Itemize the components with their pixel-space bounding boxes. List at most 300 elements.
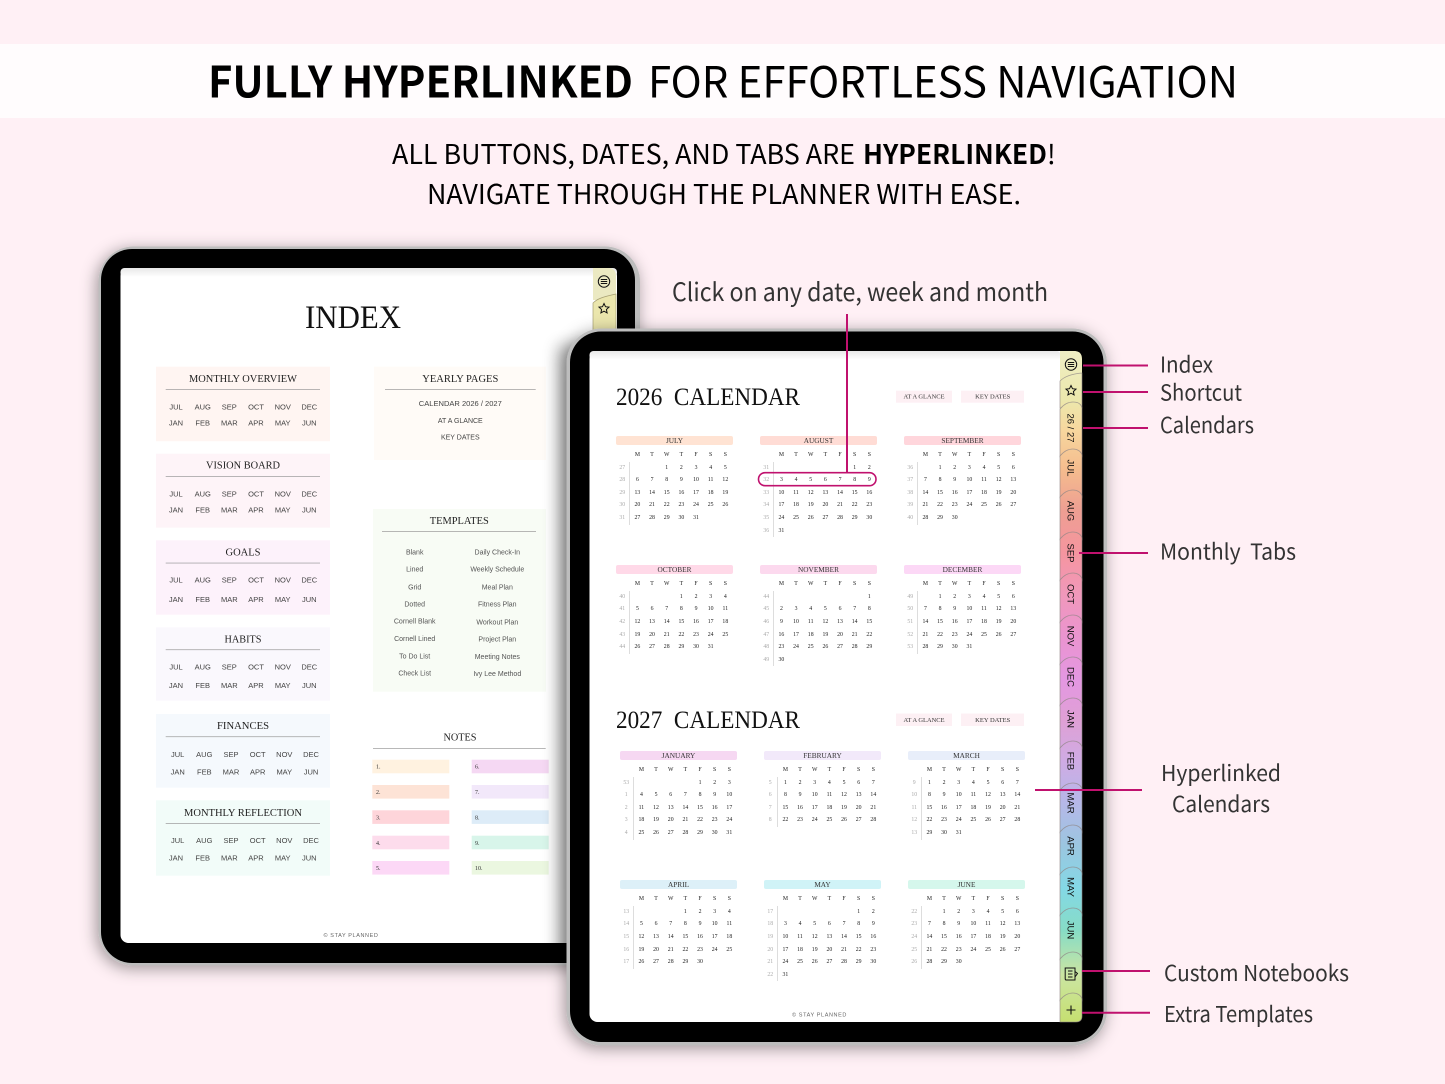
month: July 2026: 31 <box>693 515 699 521</box>
month: September 2026: 12 <box>996 477 1002 483</box>
panel: monthly overview: MAR <box>221 419 238 428</box>
month: April 2027: 26 <box>638 959 644 965</box>
callout: calendars: Calendars <box>1160 408 1254 440</box>
month: February 2027: 16 <box>797 805 803 811</box>
panel: goals: MAR <box>221 595 238 604</box>
month: June 2027: 22 <box>911 909 917 915</box>
month: November 2026: 21 <box>852 632 858 638</box>
month: May 2027: 22 <box>767 972 773 978</box>
tab labels: MAY <box>1064 877 1076 898</box>
month: September 2026: 37 <box>907 477 913 483</box>
month: January 2027: 12 <box>653 805 659 811</box>
month: June 2027: 23 <box>911 921 917 927</box>
month: September 2026: 18 <box>981 490 987 496</box>
month: December 2026: 49 <box>907 594 913 600</box>
month: January 2027: 15 <box>697 805 703 811</box>
month: March 2027: 12 <box>911 817 917 823</box>
panel: vision board: JUN <box>302 506 317 515</box>
month: August 2026: 9 <box>868 477 871 483</box>
month: November 2026: 7 <box>853 606 856 612</box>
month: October 2026: 6 <box>651 606 654 612</box>
panel: vision board: SEP <box>222 489 237 498</box>
month: May 2027: 25 <box>797 959 803 965</box>
month: December 2026: 31 <box>966 644 972 650</box>
month: March 2027: 6 <box>1001 780 1004 786</box>
panel: monthly overview: FEB <box>195 419 210 428</box>
panel: templates: Lined <box>406 567 423 574</box>
month: August 2026: 21 <box>837 502 843 508</box>
month: June 2027: 16 <box>956 934 962 940</box>
month: June 2027: 8 <box>943 921 946 927</box>
month: December 2026: 9 <box>953 606 956 612</box>
month: April 2027 <box>620 880 737 969</box>
month: September 2026: 19 <box>996 490 1002 496</box>
month: September 2026: 2 <box>953 465 956 471</box>
panel: goals: AUG <box>195 576 211 585</box>
month: December 2026: 27 <box>1010 632 1016 638</box>
month: May 2027: 20 <box>767 947 773 953</box>
month: April 2027: T <box>684 896 687 902</box>
month: April 2027: 8 <box>684 921 687 927</box>
month: April 2027: 5 <box>640 921 643 927</box>
month: December 2026: M <box>923 581 928 587</box>
month: March 2027: 11 <box>971 792 976 798</box>
month: January 2027: W <box>668 767 673 773</box>
panel: notes: 4. <box>376 841 381 847</box>
month: February 2027: 28 <box>870 817 876 823</box>
panel: monthly reflection: NOV <box>276 836 292 845</box>
month: April 2027: 10 <box>712 921 718 927</box>
month: July 2026: W <box>664 452 669 458</box>
month: August 2026: 26 <box>808 515 814 521</box>
month: April 2027: 22 <box>682 947 688 953</box>
month: July 2026: 15 <box>664 490 670 496</box>
panel: monthly reflection: APR <box>248 854 264 863</box>
month: June 2027: 21 <box>926 947 932 953</box>
month: September 2026: 25 <box>981 502 987 508</box>
panel: goals: OCT <box>248 576 264 585</box>
panel: monthly overview: JUN <box>302 419 317 428</box>
callout: hyperlinked calendars <box>1035 756 1281 819</box>
month: August 2026: S <box>868 452 871 458</box>
panel: monthly overview: JUL <box>169 403 183 412</box>
month: December 2026: 16 <box>952 619 958 625</box>
month: January 2027: JANUARY <box>662 751 695 760</box>
panel: monthly reflection: JUL <box>171 836 184 845</box>
panel: finances: MAY <box>276 768 292 777</box>
month: January 2027: 29 <box>697 830 703 836</box>
month: February 2027: T <box>828 767 831 773</box>
month: May 2027: 24 <box>782 959 788 965</box>
month: January 2027: 6 <box>669 792 672 798</box>
month: October 2026: 29 <box>678 644 684 650</box>
month: September 2026: M <box>923 452 928 458</box>
month: July 2026: 7 <box>651 477 654 483</box>
panel: finances: NOV <box>276 750 292 759</box>
month: January 2027: 5 <box>655 792 658 798</box>
month: April 2027: 13 <box>623 909 629 915</box>
month: December 2026: 8 <box>939 606 942 612</box>
month: March 2027: S <box>1016 767 1019 773</box>
panel: habits: FEB <box>195 681 210 690</box>
month: October 2026: T <box>680 581 683 587</box>
month: December 2026: 53 <box>907 644 913 650</box>
panel: monthly reflection: MAY <box>275 854 291 863</box>
month: October 2026: 31 <box>708 644 714 650</box>
panel: templates: Project Plan <box>478 636 516 643</box>
month: June 2027: 23 <box>956 947 962 953</box>
tab labels <box>1064 413 1076 939</box>
panel: vision board: APR <box>248 506 264 515</box>
month: February 2027: 5 <box>843 780 845 786</box>
panel: monthly overview: OCT <box>248 403 264 412</box>
month: August 2026: 13 <box>822 490 828 496</box>
month: October 2026 <box>616 565 733 654</box>
month: November 2026: 45 <box>763 606 769 612</box>
panel: templates: To Do List <box>399 653 430 660</box>
month: May 2027: 18 <box>767 921 773 927</box>
month: August 2026: 1 <box>853 465 856 471</box>
panel: finances: DEC <box>303 750 319 759</box>
month: July 2026: T <box>650 452 654 458</box>
month: October 2026: 13 <box>649 619 655 625</box>
panel: yearly pages: CALENDAR 2026 / 2027 <box>419 401 502 408</box>
month: March 2027: T <box>972 767 975 773</box>
month: December 2026: F <box>982 581 986 587</box>
month: October 2026: 14 <box>664 619 670 625</box>
month: December 2026: 4 <box>983 594 985 600</box>
month: May 2027: 16 <box>870 934 876 940</box>
month: February 2027: 27 <box>856 817 862 823</box>
month: July 2026: 9 <box>680 477 683 483</box>
month: August 2026: T <box>824 452 827 458</box>
month: April 2027: 15 <box>682 934 688 940</box>
month: November 2026: 46 <box>763 619 769 625</box>
panel: yearly pages: KEY DATES <box>441 434 480 442</box>
panel: goals: JUL <box>169 576 183 585</box>
month: December 2026: T <box>938 581 942 587</box>
month: March 2027: 23 <box>941 817 947 823</box>
month: January 2027: 26 <box>653 830 659 836</box>
month: April 2027: 28 <box>668 959 674 965</box>
month: April 2027: 12 <box>638 934 644 940</box>
month: May 2027: 5 <box>813 921 816 927</box>
month: April 2027: 23 <box>697 947 703 953</box>
shadow of front tablet on index screen <box>548 336 579 943</box>
month: March 2027: 11 <box>911 805 917 811</box>
panel: templates: Meeting Notes <box>475 654 520 661</box>
month: September 2026: 11 <box>981 477 987 483</box>
month: November 2026: 5 <box>824 606 827 612</box>
month: October 2026: 19 <box>634 632 640 638</box>
month: September 2026: 14 <box>922 490 928 496</box>
month: December 2026: 13 <box>1010 606 1016 612</box>
month: December 2026: 51 <box>907 619 913 625</box>
month: May 2027: 1 <box>857 909 860 915</box>
month: April 2027: 29 <box>682 959 688 965</box>
heading: 2026 calendar: 2026 CALENDAR <box>616 384 800 411</box>
month: November 2026: 4 <box>809 606 812 612</box>
month: March 2027: 12 <box>985 792 991 798</box>
month: November 2026: 12 <box>822 619 828 625</box>
panel: monthly overview: DEC <box>301 403 318 412</box>
panel: yearly pages: AT A GLANCE <box>438 418 483 425</box>
month: March 2027: 20 <box>1000 805 1006 811</box>
panel: monthly reflection: JAN <box>169 854 183 863</box>
month: March 2027: 13 <box>1000 792 1006 798</box>
month: May 2027: 21 <box>767 959 773 965</box>
month: May 2027: T <box>828 896 831 902</box>
month: December 2026: 17 <box>966 619 972 625</box>
month: August 2026: 33 <box>763 490 769 496</box>
month: August 2026: 25 <box>793 515 799 521</box>
panel: templates: Meal Plan <box>482 584 513 591</box>
month: January 2027: 19 <box>653 817 659 823</box>
button: at a glance 2026 <box>896 391 952 403</box>
index heading: INDEX <box>305 300 401 336</box>
month: March 2027: 14 <box>1014 792 1020 798</box>
month: June 2027: 30 <box>956 959 962 965</box>
month: January 2027: 13 <box>668 805 674 811</box>
month: May 2027: M <box>783 896 788 902</box>
month: January 2027 <box>620 751 737 840</box>
month: September 2026: 38 <box>907 490 913 496</box>
button: at a glance 2027: AT A GLANCE <box>904 718 945 724</box>
callout: monthly tabs: Monthly Tabs <box>1160 534 1296 566</box>
month: July 2026: 29 <box>619 490 625 496</box>
month: April 2027: 20 <box>653 947 659 953</box>
month: August 2026: S <box>853 452 856 458</box>
month: August 2026: 22 <box>852 502 858 508</box>
month: January 2027: 23 <box>712 817 718 823</box>
month: May 2027: 8 <box>857 921 860 927</box>
month: April 2027: 7 <box>669 921 672 927</box>
tab labels: OCT <box>1064 584 1076 604</box>
month: August 2026: 12 <box>808 490 814 496</box>
month: October 2026: 20 <box>649 632 655 638</box>
panel: vision board: FEB <box>195 506 210 515</box>
month: February 2027: T <box>798 767 802 773</box>
panel: monthly reflection <box>156 800 330 876</box>
month: February 2027: 13 <box>856 792 862 798</box>
month: January 2027: F <box>698 767 702 773</box>
panel: vision board: MAY <box>275 506 291 515</box>
month: December 2026 <box>904 565 1021 654</box>
month: November 2026: 17 <box>793 632 799 638</box>
month: November 2026: 28 <box>852 644 858 650</box>
panel: monthly reflection: SEP <box>223 836 239 845</box>
month: July 2026: S <box>724 452 727 458</box>
month: December 2026: W <box>952 581 957 587</box>
panel: vision board: JUL <box>169 489 183 498</box>
month: September 2026: 8 <box>939 477 942 483</box>
month: May 2027: 11 <box>797 934 803 940</box>
panel: templates: Weekly Schedule <box>470 567 524 574</box>
month: November 2026: 44 <box>763 594 769 600</box>
month: October 2026: 12 <box>634 619 640 625</box>
month: June 2027: 4 <box>987 909 989 915</box>
month: January 2027: 20 <box>668 817 674 823</box>
tab labels: SEP <box>1064 543 1076 563</box>
panel: monthly reflection: MAR <box>221 854 238 863</box>
panel: monthly overview: JAN <box>169 419 183 428</box>
month: July 2026: 27 <box>634 515 640 521</box>
month: January 2027: 11 <box>639 805 644 811</box>
panel: habits: HABITS <box>224 634 262 645</box>
month: September 2026: 10 <box>966 477 972 483</box>
month: December 2026: 29 <box>937 644 943 650</box>
panel: habits: JAN <box>169 681 183 690</box>
month: December 2026: 2 <box>953 594 956 600</box>
month: July 2026: 21 <box>649 502 655 508</box>
month: August 2026: 2 <box>868 465 871 471</box>
month: November 2026: 16 <box>778 632 784 638</box>
month: December 2026: 20 <box>1010 619 1016 625</box>
month: September 2026: S <box>1012 452 1015 458</box>
panel: habits: JUL <box>169 662 183 671</box>
month: November 2026: S <box>853 581 856 587</box>
month: September 2026: 23 <box>952 502 958 508</box>
month: June 2027: 24 <box>970 947 976 953</box>
month: August 2026: 23 <box>866 502 872 508</box>
month: April 2027: S <box>713 896 716 902</box>
month: January 2027: 25 <box>638 830 644 836</box>
month: September 2026: 22 <box>937 502 943 508</box>
panel: vision board: VISION BOARD <box>206 461 280 472</box>
header band <box>0 44 1445 118</box>
month: November 2026: 23 <box>778 644 784 650</box>
panel: goals: SEP <box>222 576 237 585</box>
panel: templates: Workout Plan <box>476 619 518 626</box>
tab labels: NOV <box>1064 626 1076 647</box>
month: December 2026: 5 <box>997 594 1000 600</box>
month: April 2027: W <box>668 896 673 902</box>
month: February 2027: F <box>842 767 846 773</box>
month: April 2027: 19 <box>638 947 644 953</box>
month: September 2026: 13 <box>1010 477 1016 483</box>
panel: finances: JAN <box>171 768 185 777</box>
front tablet: calendar page <box>566 328 1107 1046</box>
month: February 2027: 11 <box>827 792 832 798</box>
month: February 2027: 14 <box>870 792 876 798</box>
month: August 2026: 5 <box>809 477 812 483</box>
heading: 2027 calendar: 2027 CALENDAR <box>616 707 800 734</box>
month: October 2026: 25 <box>722 632 728 638</box>
month: August 2026: 36 <box>763 528 769 534</box>
month: August 2026: 16 <box>866 490 872 496</box>
month: October 2026: 23 <box>693 632 699 638</box>
month: December 2026: 15 <box>937 619 943 625</box>
month: January 2027: 3 <box>625 817 628 823</box>
panel: monthly reflection: OCT <box>250 836 266 845</box>
month: July 2026: 20 <box>634 502 640 508</box>
month: August 2026: 17 <box>778 502 784 508</box>
month: December 2026: 30 <box>952 644 958 650</box>
subtitle: ALL BUTTONS, DATES, AND TABS ARE <box>392 133 855 172</box>
month: May 2027: MAY <box>814 880 831 889</box>
month: September 2026: 40 <box>907 515 913 521</box>
month: July 2026: 5 <box>724 465 727 471</box>
subtitle: ! <box>1047 133 1056 172</box>
month: April 2027: S <box>728 896 731 902</box>
month: September 2026: 36 <box>907 465 913 471</box>
month: July 2026: 27 <box>619 465 625 471</box>
panel: monthly overview: MAY <box>275 419 291 428</box>
month: October 2026: 3 <box>709 594 712 600</box>
month: December 2026: 26 <box>996 632 1002 638</box>
month: February 2027: 22 <box>782 817 788 823</box>
month: March 2027: 17 <box>956 805 962 811</box>
month: June 2027: 27 <box>1014 947 1020 953</box>
month: March 2027: 18 <box>970 805 976 811</box>
month: February 2027: 25 <box>826 817 832 823</box>
panel: finances <box>156 714 330 788</box>
subtitle: NAVIGATE THROUGH THE PLANNER WITH EASE. <box>427 173 1021 212</box>
month: December 2026: 14 <box>922 619 928 625</box>
month: February 2027: 17 <box>812 805 818 811</box>
month: August 2026: 6 <box>824 477 827 483</box>
panel: habits: SEP <box>222 662 237 671</box>
month: August 2026: 10 <box>778 490 784 496</box>
panel: goals: JAN <box>169 595 183 604</box>
month: March 2027: 16 <box>941 805 947 811</box>
month: July 2026: 3 <box>695 465 697 471</box>
month: October 2026: 42 <box>619 619 625 625</box>
month: April 2027: 9 <box>699 921 701 927</box>
month: September 2026: 15 <box>937 490 943 496</box>
month: July 2026: T <box>680 452 683 458</box>
month: August 2026: 19 <box>808 502 814 508</box>
month: March 2027: 29 <box>926 830 932 836</box>
month: January 2027: 18 <box>638 817 644 823</box>
month: February 2027: S <box>872 767 875 773</box>
icon: star tab <box>1066 386 1076 395</box>
month: October 2026: 4 <box>724 594 727 600</box>
month: January 2027: 10 <box>726 792 732 798</box>
panel: finances: OCT <box>250 750 266 759</box>
month: June 2027: 12 <box>1000 921 1006 927</box>
month: June 2027: 14 <box>926 934 932 940</box>
month: November 2026 <box>760 565 877 666</box>
month: August 2026: T <box>794 452 798 458</box>
month: April 2027: 30 <box>697 959 703 965</box>
month: June 2027: 9 <box>957 921 960 927</box>
month: August 2026: 4 <box>795 477 798 483</box>
month: April 2027: 2 <box>699 909 701 915</box>
button: key dates 2027: KEY DATES <box>975 718 1010 724</box>
panel: habits: AUG <box>195 662 211 671</box>
month: March 2027: 10 <box>911 792 917 798</box>
calendars grid <box>616 436 1025 981</box>
month: July 2026: 17 <box>693 490 699 496</box>
month: March 2027: 31 <box>956 830 962 836</box>
panel: habits: MAY <box>275 681 291 690</box>
month: February 2027: 7 <box>872 780 875 786</box>
month: April 2027: 27 <box>653 959 659 965</box>
panel: finances: MAR <box>223 768 240 777</box>
panel: vision board: MAR <box>221 506 238 515</box>
month: July 2026: 23 <box>678 502 684 508</box>
month: May 2027: 23 <box>870 947 876 953</box>
month: January 2027: 53 <box>623 780 629 786</box>
month: December 2026: 11 <box>981 606 987 612</box>
month: July 2026: M <box>635 452 640 458</box>
panel: habits: NOV <box>275 662 291 671</box>
month: November 2026: T <box>824 581 827 587</box>
month: February 2027: S <box>857 767 860 773</box>
month: October 2026: F <box>694 581 698 587</box>
month: June 2027: 20 <box>1014 934 1020 940</box>
